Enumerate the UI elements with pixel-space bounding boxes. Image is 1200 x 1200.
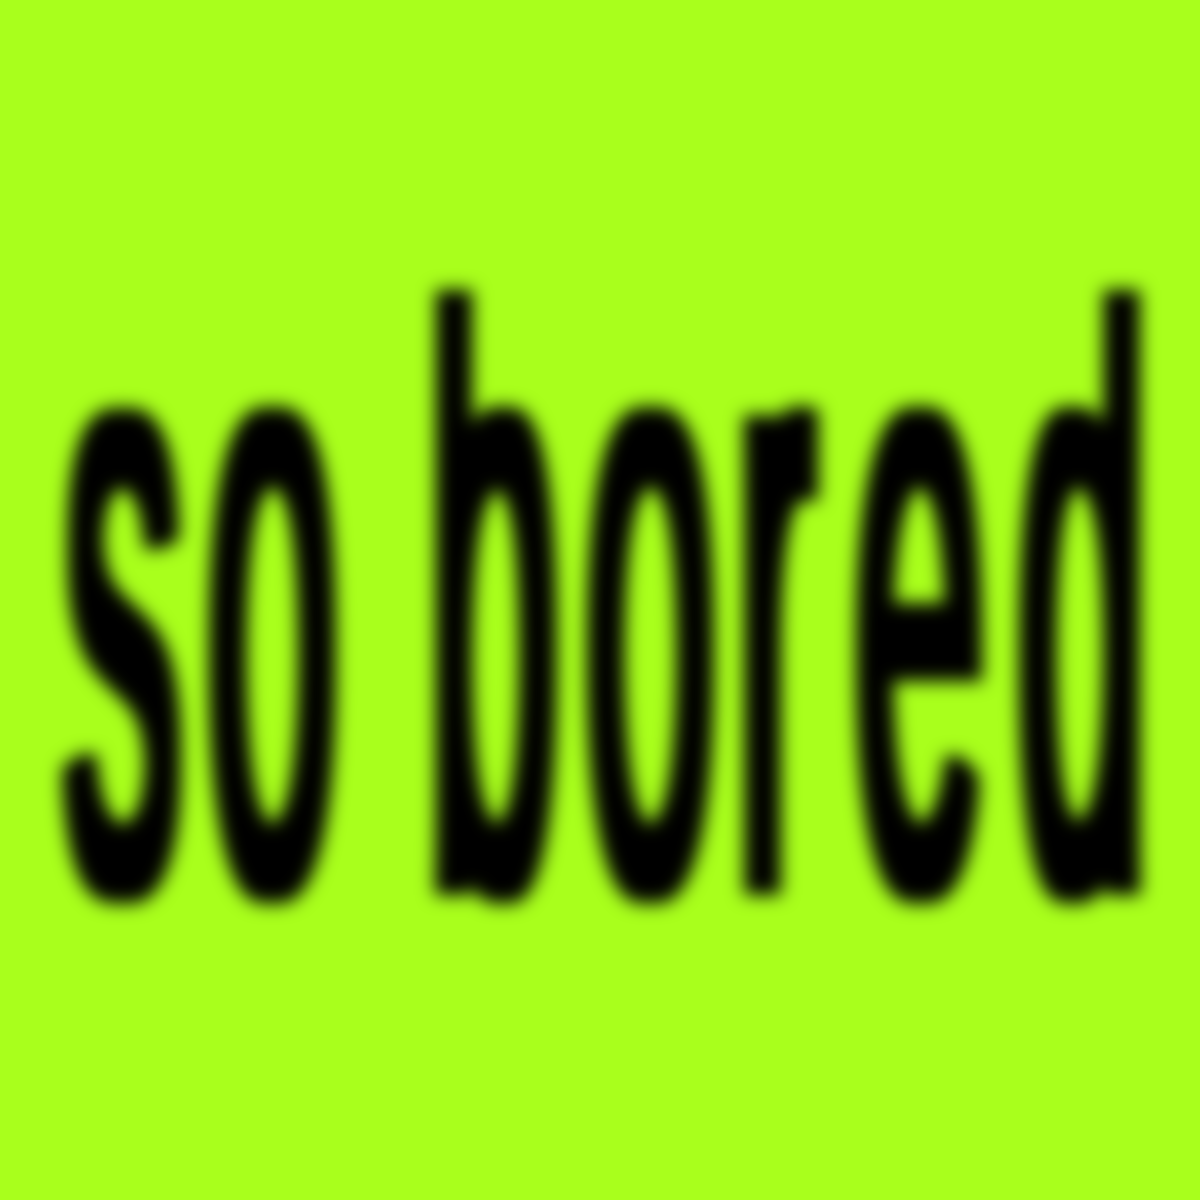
title: so bored: so bored — [64, 99, 1148, 1071]
